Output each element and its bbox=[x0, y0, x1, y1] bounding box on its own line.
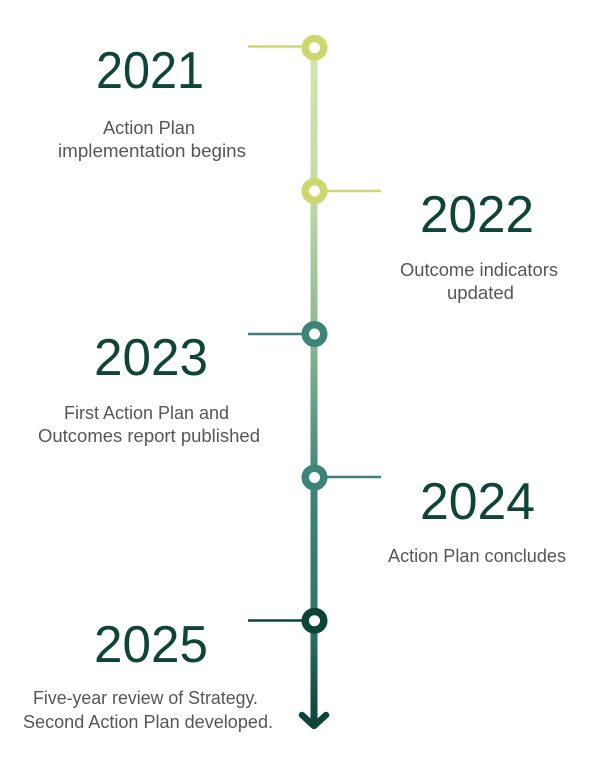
milestone 2023 bbox=[38, 325, 324, 446]
timeline line bbox=[310, 48, 318, 722]
milestone 2023: Outcomes report published bbox=[38, 426, 260, 446]
milestone 2025: Second Action Plan developed. bbox=[23, 712, 273, 732]
milestone 2023: 2023 bbox=[94, 329, 208, 387]
milestone 2024 bbox=[305, 468, 566, 566]
milestone 2024: Action Plan concludes bbox=[388, 546, 566, 566]
milestone 2022: updated bbox=[447, 283, 514, 303]
milestone 2023: First Action Plan and bbox=[64, 403, 229, 423]
milestone 2022: Outcome indicators bbox=[400, 260, 558, 280]
milestone 2021 bbox=[58, 38, 324, 161]
milestone 2022: 2022 bbox=[420, 186, 534, 244]
milestone 2024: 2024 bbox=[420, 473, 535, 531]
milestone 2021: Action Plan bbox=[103, 118, 195, 138]
arrow head bbox=[302, 715, 326, 726]
milestone 2025: 2025 bbox=[94, 616, 208, 674]
milestone 2021: implementation begins bbox=[58, 141, 246, 161]
milestone 2025: Five-year review of Strategy. bbox=[33, 688, 258, 708]
milestone 2025 bbox=[23, 611, 324, 732]
milestone 2022 bbox=[305, 182, 558, 303]
milestone 2021: 2021 bbox=[96, 42, 204, 100]
